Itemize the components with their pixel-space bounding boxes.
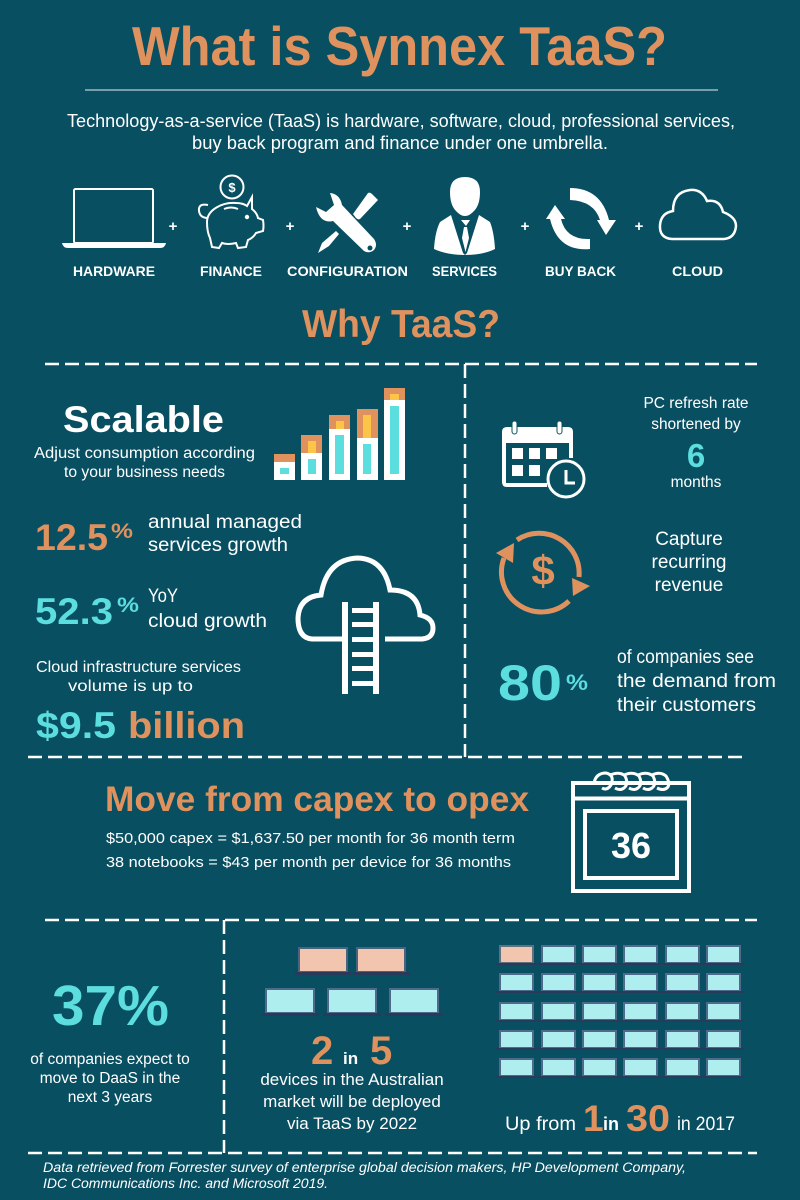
- stat: 12.5%: annual managed: [148, 511, 302, 533]
- text: recurring revenue: [652, 529, 726, 596]
- stat: 80%: %: [566, 670, 588, 695]
- capex text: [106, 830, 515, 871]
- stat: 1 in 30: 30: [626, 1098, 670, 1139]
- icon: buy back arrows: [546, 188, 616, 249]
- stat: 1 in 30: in 2017: [677, 1114, 735, 1135]
- icon: 36 month calendar: [573, 773, 689, 891]
- icon: recurring dollar: $: [531, 547, 555, 594]
- text: pc refresh: shortened by: [651, 416, 741, 433]
- icon labels: CLOUD: [672, 263, 723, 279]
- scalable text: to your business needs: [64, 464, 225, 481]
- stat: cloud infrastructure: volume is up to: [68, 678, 193, 695]
- stat: 12.5%: [35, 511, 302, 558]
- laptops: 1 in 30 grid: [496, 946, 744, 1078]
- bar chart: [274, 388, 405, 480]
- stat: cloud infrastructure: [36, 659, 245, 746]
- intro text: Technology-as-a-service (TaaS) is hardware, software, cloud, professional services,: [67, 111, 735, 131]
- text: pc refresh: 6: [687, 437, 705, 474]
- stat: 80%: [498, 646, 776, 716]
- stat: 37%: 37%: [52, 974, 169, 1038]
- icon: cloud: [660, 190, 736, 239]
- text: pc refresh: [643, 395, 749, 491]
- stat: 12.5%: services growth: [148, 534, 288, 556]
- icon labels: [73, 263, 723, 279]
- icon: piggy bank: [199, 176, 264, 248]
- scalable text: Adjust consumption according: [34, 445, 255, 462]
- stat: cloud infrastructure: Cloud infrastructure services: [36, 659, 241, 676]
- stat: 52.3%: cloud growth: [148, 610, 267, 632]
- stat: 12.5%: 12.5: [35, 517, 108, 558]
- icon labels: CONFIGURATION: [287, 263, 408, 279]
- icon labels: SERVICES: [432, 263, 497, 279]
- title: What is Synnex TaaS?: [132, 15, 667, 77]
- plus signs: [169, 218, 644, 235]
- source note: Data retrieved from Forrester survey of enterprise global decision makers, HP Development Company,: [43, 1160, 686, 1175]
- text: recurring revenue: Capture: [655, 529, 723, 550]
- stat: 37%: [30, 974, 190, 1106]
- plus signs: +: [521, 218, 530, 235]
- capex text: $50,000 capex = $1,637.50 per month for 36 month term: [106, 830, 515, 847]
- icon: businessman: [434, 177, 495, 255]
- stat: 80%: 80: [498, 655, 562, 711]
- stat: 2 in 5: market will be deployed: [263, 1092, 441, 1111]
- stat: 37%: next 3 years: [68, 1089, 152, 1106]
- stat: 1 in 30: in: [603, 1114, 619, 1134]
- heading: scalable: Scalable: [63, 399, 224, 440]
- icon: calendar with clock: [502, 421, 584, 497]
- heading: why taas: Why TaaS?: [302, 303, 500, 346]
- plus signs: +: [169, 218, 178, 235]
- capex text: 38 notebooks = $43 per month per device for 36 months: [106, 854, 511, 871]
- text: recurring revenue: recurring: [652, 552, 726, 573]
- icon labels: BUY BACK: [545, 263, 616, 279]
- intro text: buy back program and finance under one umbrella.: [192, 133, 608, 153]
- source note: IDC Communications Inc. and Microsoft 2019.: [43, 1176, 328, 1191]
- stat: 1 in 30: Up from: [505, 1114, 576, 1135]
- stat: 1 in 30: [505, 1098, 735, 1139]
- intro text: [67, 111, 735, 153]
- plus signs: +: [635, 218, 644, 235]
- stat: 2 in 5: 5: [370, 1029, 392, 1073]
- stat: 52.3%: %: [117, 594, 139, 617]
- icon labels: HARDWARE: [73, 263, 155, 279]
- stat: 80%: the demand from: [617, 670, 776, 692]
- text: recurring revenue: revenue: [655, 575, 723, 596]
- stat: 37%: of companies expect to: [30, 1051, 190, 1068]
- stat: 2 in 5: devices in the Australian: [260, 1070, 444, 1089]
- stat: 37%: move to DaaS in the: [40, 1070, 180, 1087]
- stat: 52.3%: 52.3: [35, 591, 113, 632]
- laptops: 2 in 5: [261, 948, 443, 1016]
- scalable text: [34, 445, 255, 481]
- stat: 80%: their customers: [617, 694, 756, 716]
- icon: cloud with ladder: [298, 558, 433, 694]
- plus signs: +: [403, 218, 412, 235]
- stat: 2 in 5: in: [343, 1049, 358, 1068]
- stat: cloud infrastructure: $9.5: [36, 705, 116, 746]
- text: pc refresh: months: [671, 474, 722, 491]
- stat: 2 in 5: [260, 1029, 444, 1133]
- stat: 2 in 5: via TaaS by 2022: [287, 1114, 417, 1133]
- stat: 80%: of companies see: [617, 646, 754, 668]
- stat: cloud infrastructure: billion: [128, 705, 245, 746]
- heading: capex to opex: Move from capex to opex: [105, 780, 530, 819]
- icon labels: FINANCE: [200, 263, 262, 279]
- source note: [43, 1160, 686, 1191]
- stat: 52.3%: [35, 585, 267, 632]
- icon: 36 month calendar: 36: [611, 825, 651, 866]
- text: pc refresh: PC refresh rate: [643, 395, 749, 412]
- icon: tools: [316, 193, 378, 253]
- icon: piggy bank: $: [228, 180, 236, 195]
- icon: recurring dollar: [496, 533, 590, 612]
- plus signs: +: [286, 218, 295, 235]
- stat: 1 in 30: 1: [583, 1098, 604, 1139]
- icon: laptop: [62, 189, 166, 248]
- stat: 2 in 5: 2: [311, 1029, 333, 1073]
- stat: 12.5%: %: [111, 520, 133, 543]
- stat: 52.3%: YoY: [148, 585, 178, 607]
